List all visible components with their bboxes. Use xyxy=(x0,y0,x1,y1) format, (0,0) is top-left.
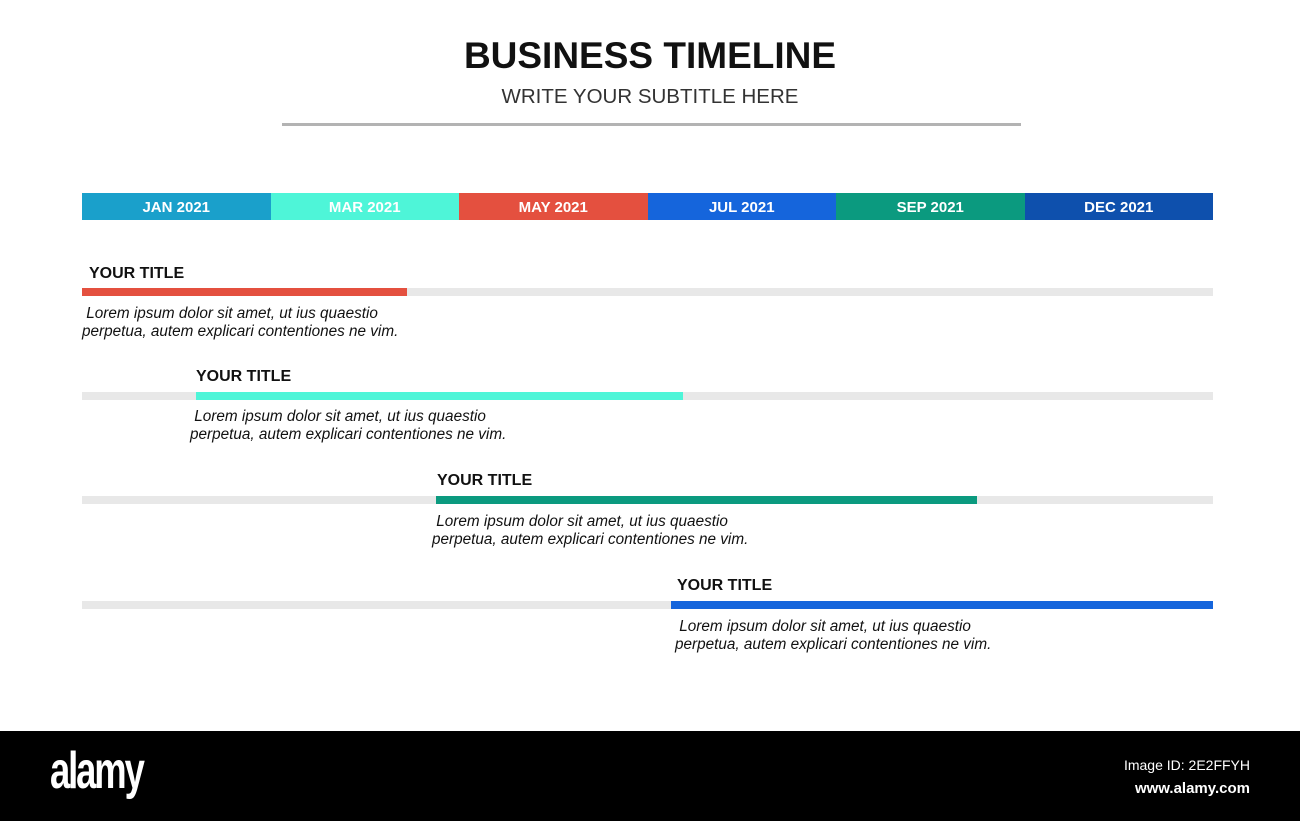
row 2 bar xyxy=(196,392,683,400)
row 1 title: YOUR TITLE xyxy=(89,265,184,282)
month: DEC xyxy=(1024,193,1213,220)
footer image id: www.alamy.com xyxy=(1135,780,1250,797)
month bar xyxy=(82,193,1213,220)
row 2 text: Lorem ipsum dolor sit amet, ut ius quaestio xyxy=(194,408,486,425)
row 4 text: Lorem ipsum dolor sit amet, ut ius quaestio xyxy=(679,618,971,635)
row 2 xyxy=(82,368,1213,443)
month: JAN: JAN 2021 xyxy=(142,199,210,216)
row 3 track xyxy=(82,496,1213,504)
row 1 text: Lorem ipsum dolor sit amet, ut ius quaestio xyxy=(86,305,378,322)
row 3 xyxy=(82,472,1213,548)
month: MAR: MAR 2021 xyxy=(329,199,401,216)
footer xyxy=(0,731,1300,821)
footer image id xyxy=(1124,757,1250,797)
row 2 track xyxy=(82,392,1213,400)
row 1 xyxy=(82,265,1213,340)
month: JAN xyxy=(82,193,270,220)
footer logo: alamy xyxy=(50,742,143,800)
row 4 title: YOUR TITLE xyxy=(677,577,772,594)
row 1 bar xyxy=(82,288,407,296)
month: JUL xyxy=(648,193,836,220)
row 2 text xyxy=(190,408,506,443)
subtitle: WRITE YOUR SUBTITLE HERE xyxy=(502,85,798,108)
row 1 text xyxy=(82,305,398,340)
month: MAY xyxy=(459,193,648,220)
row 3 text: perpetua, autem explicari contentiones ne vim. xyxy=(432,531,748,548)
month: MAR xyxy=(270,193,459,220)
row 4 xyxy=(82,577,1213,653)
month: MAY: MAY 2021 xyxy=(519,199,588,216)
footer image id: Image ID: 2E2FFYH xyxy=(1124,757,1250,773)
row 4 text xyxy=(674,618,991,653)
title: BUSINESS TIMELINE xyxy=(464,35,836,76)
month: DEC: DEC 2021 xyxy=(1084,199,1153,216)
row 4 track xyxy=(82,601,1213,609)
row 1 text: perpetua, autem explicari contentiones ne vim. xyxy=(82,323,398,340)
row 2 text: perpetua, autem explicari contentiones ne vim. xyxy=(190,426,506,443)
row 3 title: YOUR TITLE xyxy=(437,472,532,489)
row 3 bar xyxy=(436,496,977,504)
row 4 text: perpetua, autem explicari contentiones ne vim. xyxy=(675,636,991,653)
month: SEP xyxy=(836,193,1024,220)
month: SEP: SEP 2021 xyxy=(897,199,964,216)
month: JUL: JUL 2021 xyxy=(709,199,775,216)
divider xyxy=(282,123,1021,126)
row 4 bar xyxy=(671,601,1213,609)
row 1 track xyxy=(82,288,1213,296)
row 2 title: YOUR TITLE xyxy=(196,368,291,385)
row 3 text xyxy=(432,513,748,548)
row 3 text: Lorem ipsum dolor sit amet, ut ius quaestio xyxy=(436,513,728,530)
